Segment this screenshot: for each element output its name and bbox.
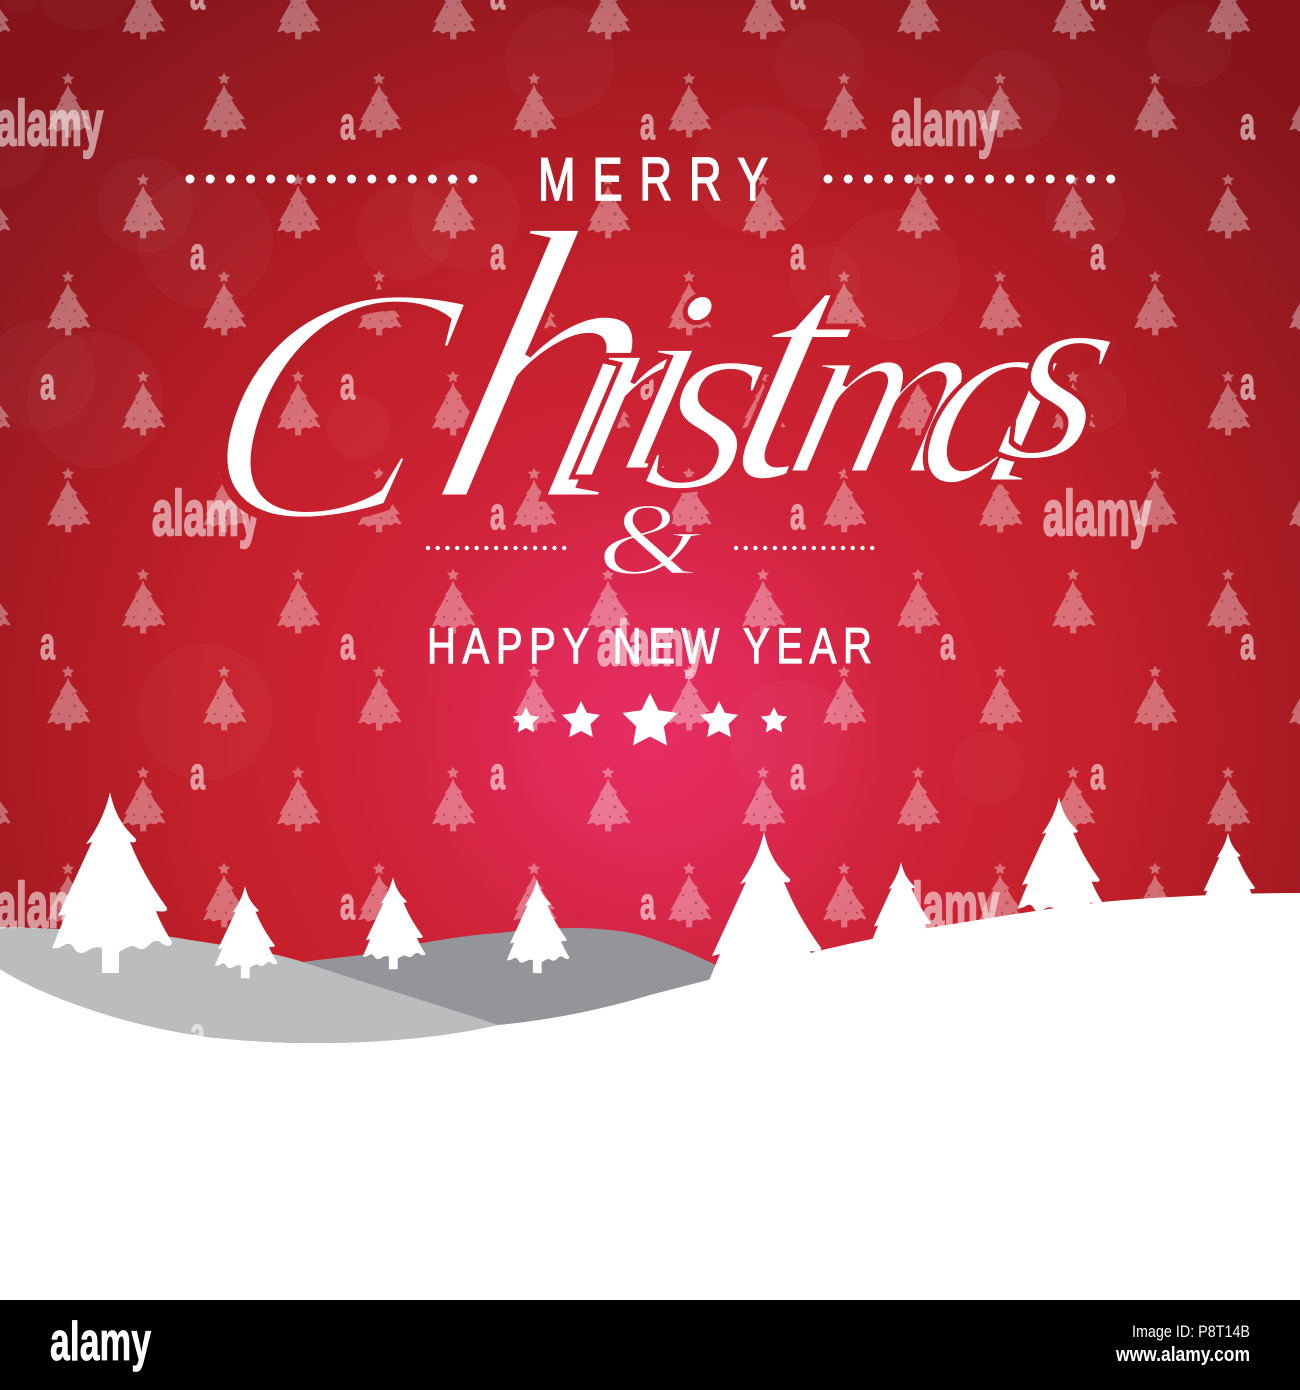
- footer logo: alamy: [50, 1310, 151, 1372]
- watermark: small repeated letters: a: [40, 358, 56, 409]
- image id: Image ID: P8T14B: [1132, 1322, 1250, 1341]
- heading: script Christmas: C: [167, 215, 495, 592]
- watermark: small repeated letters: a: [190, 748, 206, 799]
- watermark: small repeated letters: a: [640, 878, 656, 929]
- watermark: small repeated letters: a: [640, 98, 656, 149]
- pattern: translucent Christmas trees: [0, 0, 1300, 927]
- white trees on the hills: [52, 792, 1257, 1013]
- watermark: small repeated letters: a: [340, 618, 356, 669]
- footer: black bar: [0, 1300, 1300, 1390]
- watermark: large repeated wordmarks: alamy: [1043, 479, 1151, 549]
- watermark: large repeated wordmarks: alamy: [891, 89, 999, 159]
- watermark: small repeated letters: a: [190, 1008, 206, 1059]
- heading: script Christmas: m: [767, 259, 1007, 525]
- watermark: small repeated letters: a: [940, 358, 956, 409]
- watermark: small repeated letters: a: [1090, 228, 1106, 279]
- heading: script Christmas: s: [624, 249, 803, 547]
- watermark: small repeated letters: a: [790, 748, 806, 799]
- heading: script Christmas: s: [977, 228, 1149, 515]
- watermark: small repeated letters: a: [490, 748, 506, 799]
- dotted rule: top right: [828, 174, 1111, 184]
- ampersand: &: [597, 482, 703, 597]
- watermark: large repeated wordmarks: alamy: [597, 609, 705, 679]
- watermark: small repeated letters: a: [190, 228, 206, 279]
- watermark: small repeated letters: a: [1240, 98, 1256, 149]
- icons: row of five stars: [513, 693, 787, 745]
- watermark: small repeated letters: a: [790, 488, 806, 539]
- watermark: large repeated wordmarks: alamy: [891, 871, 999, 941]
- heading: script Christmas: h: [402, 150, 705, 583]
- watermark: large repeated wordmarks: [0, 89, 1151, 941]
- heading: script Christmas: a: [896, 252, 1097, 539]
- watermark: small repeated letters: a: [340, 878, 356, 929]
- watermark: small repeated letters: a: [790, 228, 806, 279]
- watermark: large repeated wordmarks: alamy: [0, 871, 103, 941]
- heading: script Christmas: t: [701, 185, 895, 550]
- dotted rule: middle left: [428, 546, 565, 550]
- watermark: small repeated letters: a: [490, 228, 506, 279]
- heading: script Christmas: r: [547, 242, 727, 535]
- watermark: small repeated letters: a: [340, 358, 356, 409]
- watermark: small repeated letters: a: [640, 358, 656, 409]
- bokeh light circles: [0, 0, 1232, 803]
- heading: HAPPY NEW YEAR: HAPPY NEW YEAR: [427, 618, 879, 674]
- watermark: small repeated letters: a: [490, 488, 506, 539]
- hill: light grey: [0, 927, 498, 1043]
- website: www.alamy.com: [1115, 1344, 1250, 1366]
- dotted rule: top left: [190, 174, 473, 184]
- watermark: small repeated letters: a: [340, 98, 356, 149]
- watermark: small repeated letters: a: [40, 618, 56, 669]
- watermark: large repeated wordmarks: alamy: [0, 89, 103, 159]
- watermark: small repeated letters: a: [1240, 618, 1256, 669]
- watermark: small repeated letters: a: [1090, 748, 1106, 799]
- heading: script Christmas: i: [593, 235, 740, 528]
- heading: MERRY: MERRY: [538, 147, 785, 214]
- hill: dark grey: [303, 928, 730, 1035]
- watermark: small repeated letters: a: [940, 618, 956, 669]
- watermark: small repeated letters: a: [1240, 358, 1256, 409]
- foreground white snow: [0, 893, 1300, 1300]
- dotted rule: middle right: [736, 546, 873, 550]
- watermark: small repeated letters: [40, 0, 1256, 1059]
- watermark: large repeated wordmarks: alamy: [152, 479, 260, 549]
